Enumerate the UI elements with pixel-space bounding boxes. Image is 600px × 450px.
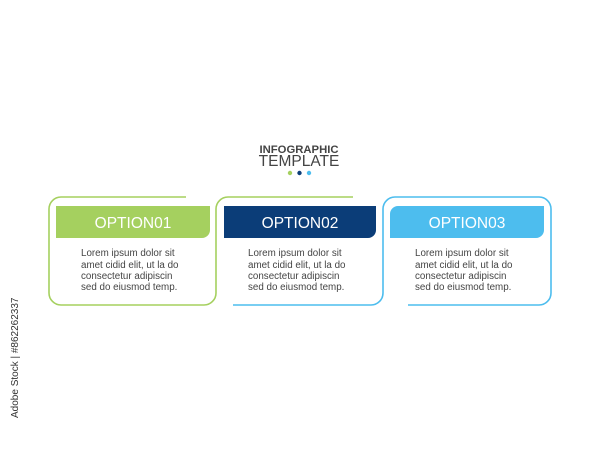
title xyxy=(259,144,339,170)
panel: option 2 xyxy=(224,206,376,293)
text block 3: consectetur adipiscin xyxy=(415,271,506,282)
text block 3: sed do eiusmod temp. xyxy=(415,282,511,293)
text block 1: Lorem ipsum dolor sit xyxy=(81,248,175,259)
title: TEMPLATE xyxy=(259,153,339,170)
title dots xyxy=(288,171,311,175)
outline: blue frame xyxy=(233,197,551,305)
header: option03 xyxy=(390,206,544,238)
text block 2: Lorem ipsum dolor sit xyxy=(248,248,342,259)
panel: option 3 xyxy=(390,206,544,293)
panel: option 1 xyxy=(56,206,210,293)
header: option02 xyxy=(224,206,376,238)
header: option01: OPTION01 xyxy=(95,215,171,232)
header: option02: OPTION02 xyxy=(262,215,338,232)
side id text: Adobe Stock | #862262337 xyxy=(10,297,21,418)
header: option01 xyxy=(56,206,210,238)
text block 1: sed do eiusmod temp. xyxy=(81,282,177,293)
text block 3: amet cidid elit, ut la do xyxy=(415,260,513,271)
text block 2: consectetur adipiscin xyxy=(248,271,340,282)
title: INFOGRAPHIC xyxy=(259,144,339,156)
text block 1: amet cidid elit, ut la do xyxy=(81,260,179,271)
outline: green frame xyxy=(49,197,353,305)
text block 3: Lorem ipsum dolor sit xyxy=(415,248,509,259)
text block 2: sed do eiusmod temp. xyxy=(248,282,344,293)
text block 1: consectetur adipiscin xyxy=(81,271,172,282)
header: option03: OPTION03 xyxy=(429,215,505,232)
text block 2: amet cidid elit, ut la do xyxy=(248,260,346,271)
